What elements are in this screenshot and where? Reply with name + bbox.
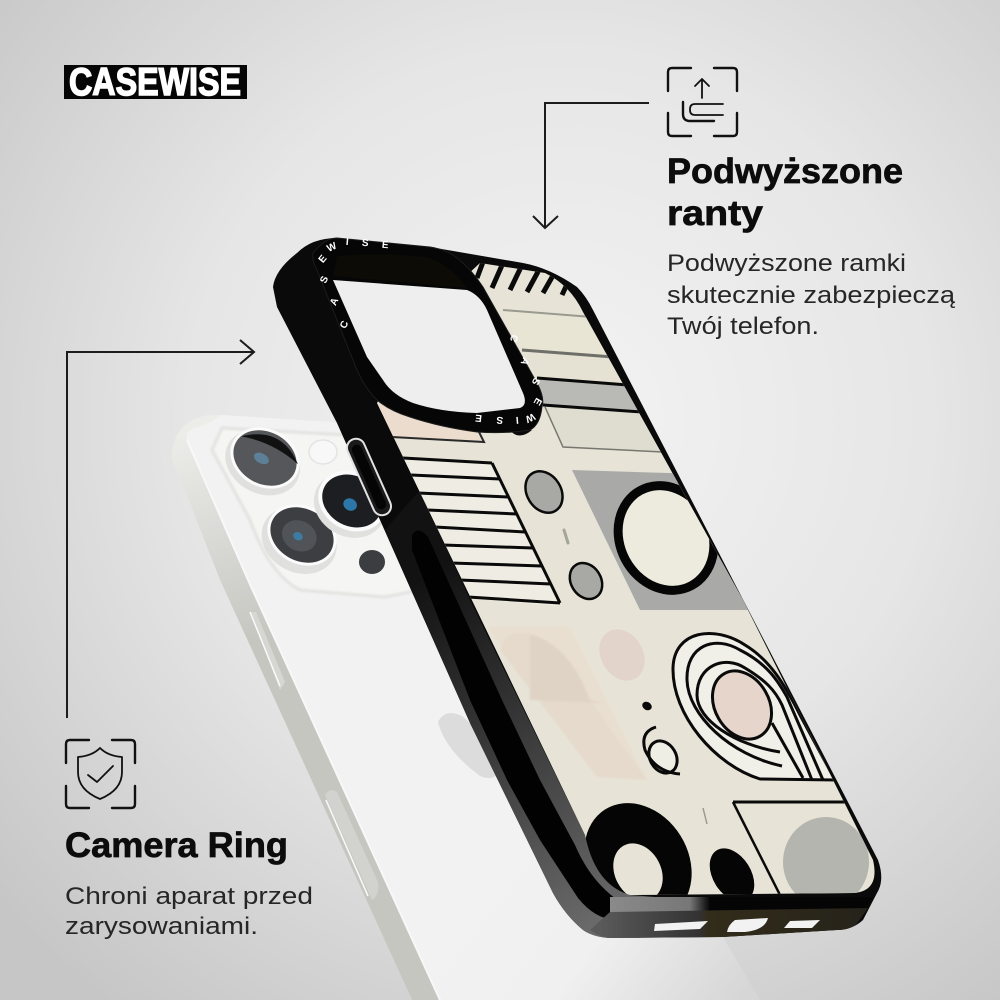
text: camera ring: [65, 883, 313, 940]
top slashes: [477, 262, 569, 295]
ring lettering: W: [523, 410, 537, 424]
sensor: [359, 550, 385, 574]
port: mic: [784, 920, 820, 928]
bottom edge: [610, 897, 873, 920]
text: raised edges: Podwyższone ramki: [667, 250, 906, 277]
pale bands: [503, 310, 663, 452]
apple logo: [438, 713, 500, 778]
black ring bottom: [586, 803, 692, 895]
heading: raised edges: Podwyższone: [667, 152, 903, 191]
ring lettering: A: [328, 296, 341, 308]
logo: CASEWISE: CASEWISE: [69, 61, 241, 104]
ring lettering: C: [507, 332, 520, 344]
text: raised edges: Twój telefon.: [667, 313, 819, 340]
case body: [273, 238, 881, 938]
ring lettering: S: [529, 376, 542, 387]
printed case back: [377, 262, 875, 941]
black case: [273, 238, 881, 938]
ring lettering: I: [345, 237, 349, 248]
ring lettering: E: [381, 240, 389, 251]
side button pill: [344, 436, 394, 518]
peach arch block: [501, 632, 645, 780]
text: raised edges: skutecznie zabezpieczą: [667, 282, 956, 309]
arrow: to raised edges: [533, 103, 649, 228]
ring lettering: E: [317, 253, 330, 265]
port: speaker: [654, 921, 708, 931]
lens: top left: [214, 414, 313, 508]
heading: raised edges: [667, 152, 903, 233]
peach block: [377, 403, 532, 442]
text: raised edges: [667, 250, 956, 340]
icon: shield: [66, 740, 135, 808]
gray square with circle: [572, 470, 748, 610]
arrow: to camera ring: [67, 340, 254, 718]
ring lettering: E: [474, 412, 483, 423]
gray ovals: [524, 470, 604, 600]
heading: raised edges: ranty: [667, 194, 764, 233]
ring lettering: S: [361, 238, 369, 249]
camera ring: [313, 237, 544, 433]
lower box: [733, 802, 869, 907]
striped block: [403, 458, 560, 606]
ring lettering: [317, 237, 544, 425]
camera cutout: [333, 280, 525, 413]
lens: right: [302, 458, 398, 550]
ring lettering: S: [318, 274, 331, 285]
ring lettering: A: [518, 355, 531, 367]
text: camera ring: Chroni aparat przed: [65, 883, 313, 910]
camera plateau: [212, 428, 420, 597]
port: charging: [727, 918, 768, 932]
peach circle: [600, 630, 644, 680]
ring lettering: W: [325, 241, 339, 255]
lower side wall: [385, 490, 655, 938]
flash: [309, 440, 337, 464]
phone side bevel: [172, 415, 440, 1000]
action button: [325, 790, 378, 900]
heading: camera ring: Camera Ring: [65, 826, 288, 865]
icon: raised edges: [668, 68, 737, 136]
black oval bottom: [710, 848, 754, 894]
white phone behind the case: [172, 414, 760, 1000]
concentric loops: [673, 633, 835, 780]
text: camera ring: zarysowaniami.: [65, 913, 258, 940]
ring lettering: C: [338, 319, 351, 331]
lens: bottom: [250, 491, 350, 587]
dot: [642, 702, 652, 710]
small ring: [643, 727, 683, 778]
ring lettering: I: [515, 414, 519, 425]
ring lettering: S: [496, 414, 504, 425]
ring lettering: E: [531, 396, 544, 407]
volume button: [250, 612, 285, 690]
side black band: [412, 530, 628, 919]
